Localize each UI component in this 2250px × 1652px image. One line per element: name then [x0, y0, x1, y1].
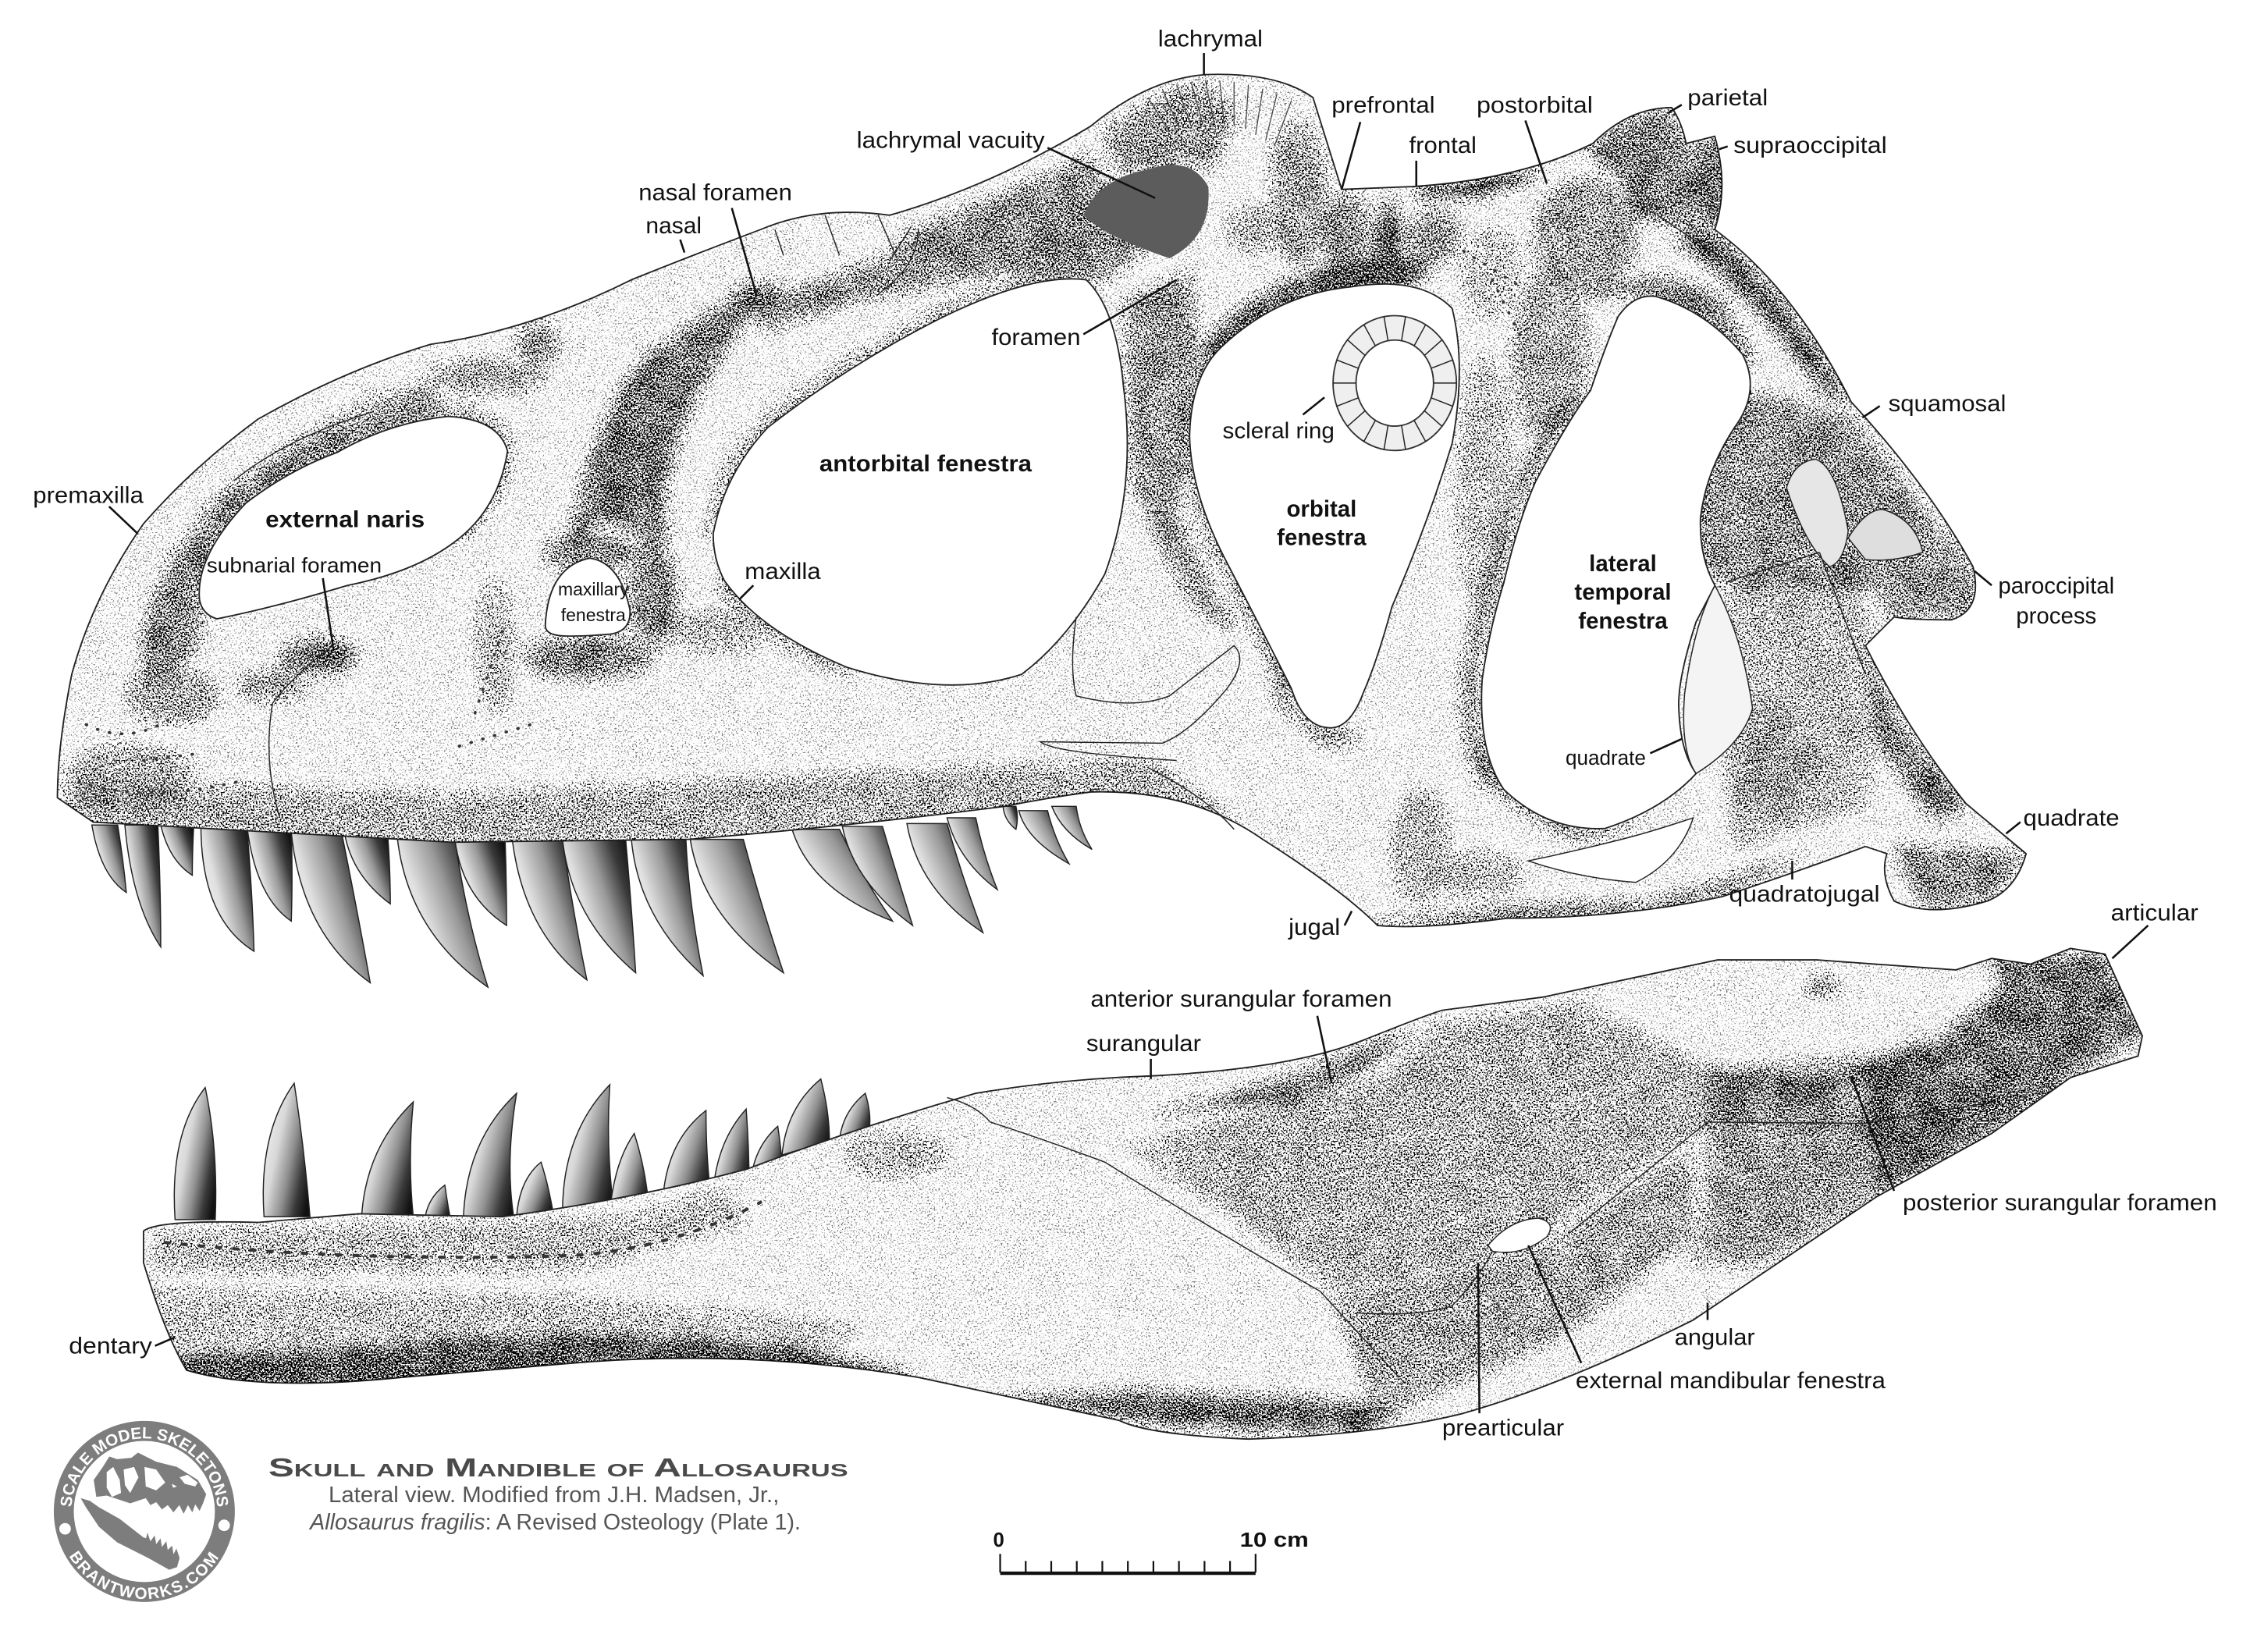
logo jaw silhouette [80, 1498, 180, 1570]
label: quadrate, inner [1566, 739, 1682, 769]
orbital fenestra opening [1189, 284, 1459, 728]
scale bar: 0 [993, 1529, 1004, 1551]
lateral temporal fenestra opening [1481, 296, 1751, 829]
scale bar: 10 cm [1240, 1529, 1309, 1551]
label: orbital fenestra: fenestra [1277, 525, 1367, 551]
antorbital, narial, orbital and temporal openings [199, 279, 1751, 829]
mandible sutures and pits [165, 1098, 1995, 1377]
label: quadrate, inner: quadrate [1566, 748, 1646, 769]
label: postorbital: postorbital [1477, 92, 1593, 118]
logo ring text [59, 1426, 230, 1600]
scale bar [993, 1529, 1309, 1573]
logo ring paths [57, 1438, 232, 1599]
label: supraoccipital: supraoccipital [1733, 133, 1887, 158]
logo ring text: BRANTWORKS.COM [69, 1551, 219, 1600]
mandible bone outline [144, 948, 2142, 1439]
label: external mandibular fenestra: external mandibular fenestra [1576, 1368, 1886, 1394]
label: parietal: parietal [1687, 85, 1768, 111]
label: articular: articular [2111, 900, 2198, 925]
label: nasal foramen [638, 179, 792, 294]
label: angular: angular [1675, 1325, 1755, 1351]
label: lachrymal vacuity [857, 127, 1155, 198]
caption line 2: Allosaurus fragilis: A Revised Osteology (Plate 1). [308, 1510, 801, 1535]
label: prearticular: prearticular [1442, 1416, 1564, 1441]
label: premaxilla [33, 482, 144, 534]
external naris opening [199, 417, 507, 619]
label: squamosal: squamosal [1889, 391, 2006, 417]
lachrymal fan ridges [1148, 80, 1292, 147]
label: quadrate, condyle: quadrate [2023, 805, 2120, 831]
skull bone outline [58, 74, 2026, 926]
label: nasal: nasal [645, 213, 702, 239]
label: lachrymal: lachrymal [1158, 27, 1263, 52]
external mandibular fenestra opening [1488, 1218, 1551, 1252]
title: Skull and Mandible of Allosaurus [268, 1454, 848, 1483]
label: lachrymal vacuity: lachrymal vacuity [857, 127, 1045, 153]
logo skull silhouette [94, 1452, 206, 1514]
label: surangular: surangular [1086, 1031, 1201, 1057]
label: posterior surangular foramen: posterior surangular foramen [1903, 1190, 2217, 1216]
quadrate flap [1683, 585, 1753, 773]
label: lachrymal [1158, 27, 1263, 75]
illustration: mandible lateral view [70, 904, 2216, 1441]
label: paroccipital process: process [2016, 603, 2096, 629]
label: jugal [1288, 911, 1352, 940]
illustration: skull lateral view [34, 30, 2118, 989]
label: maxilla: maxilla [745, 559, 821, 584]
label: external mandibular fenestra [1528, 1245, 1886, 1394]
label: frontal: frontal [1409, 133, 1477, 158]
label: antorbital fenestra: antorbital fenestra [819, 451, 1033, 477]
skull sutures, pits and highlights [79, 215, 1923, 883]
mandible stippled shading [144, 949, 2142, 1439]
label: maxilla [739, 559, 821, 600]
label: angular [1675, 1302, 1755, 1351]
maxillary fenestra opening [546, 558, 630, 636]
label: paroccipital process: paroccipital [1998, 573, 2114, 599]
label: jugal: jugal [1288, 915, 1340, 940]
label: paroccipital process [1975, 571, 2114, 629]
upper teeth [92, 806, 1092, 987]
label: scleral ring: scleral ring [1223, 419, 1335, 444]
skull stippled shading [58, 75, 2026, 927]
logo ring text: SCALE MODEL SKELETONS [61, 1426, 228, 1507]
label: lateral temporal fenestra: fenestra [1578, 608, 1668, 634]
label: subnarial foramen: subnarial foramen [207, 554, 382, 577]
label: lateral temporal fenestra: lateral [1589, 551, 1657, 577]
antorbital fenestra opening [713, 279, 1127, 685]
label: orbital fenestra: orbital [1286, 496, 1356, 522]
label: quadratojugal: quadratojugal [1729, 882, 1880, 908]
label: posterior surangular foramen [1851, 1076, 2217, 1216]
label: articular [2111, 900, 2198, 958]
label: anterior surangular foramen: anterior surangular foramen [1090, 986, 1392, 1012]
label: parietal [1668, 85, 1768, 113]
logo: Scale Model Skeletons badge [53, 1420, 235, 1602]
label: foramen: foramen [992, 325, 1081, 350]
label: maxillary fenestra: fenestra [561, 605, 626, 625]
scleral ring [1333, 315, 1456, 450]
label: nasal foramen: nasal foramen [638, 179, 792, 205]
label: prefrontal: prefrontal [1331, 92, 1435, 118]
label: dentary: dentary [69, 1334, 152, 1359]
label: subnarial foramen [207, 554, 382, 645]
label: external naris: external naris [265, 507, 425, 533]
lachrymal vacuity [1083, 165, 1209, 258]
label: prefrontal [1331, 92, 1435, 190]
label: premaxilla: premaxilla [33, 482, 144, 508]
label: scleral ring [1223, 397, 1335, 444]
label: foramen [992, 280, 1177, 350]
label: lateral temporal fenestra: temporal [1574, 580, 1672, 606]
label: maxillary fenestra: maxillary [558, 579, 629, 599]
label: anterior surangular foramen [1090, 986, 1392, 1083]
lower teeth [174, 1079, 870, 1220]
title block [268, 1454, 848, 1535]
label: frontal [1409, 133, 1477, 187]
caption line 1: Lateral view. Modified from J.H. Madsen, Jr., [329, 1483, 779, 1508]
label: postorbital [1477, 92, 1593, 183]
label: nasal [645, 213, 702, 253]
